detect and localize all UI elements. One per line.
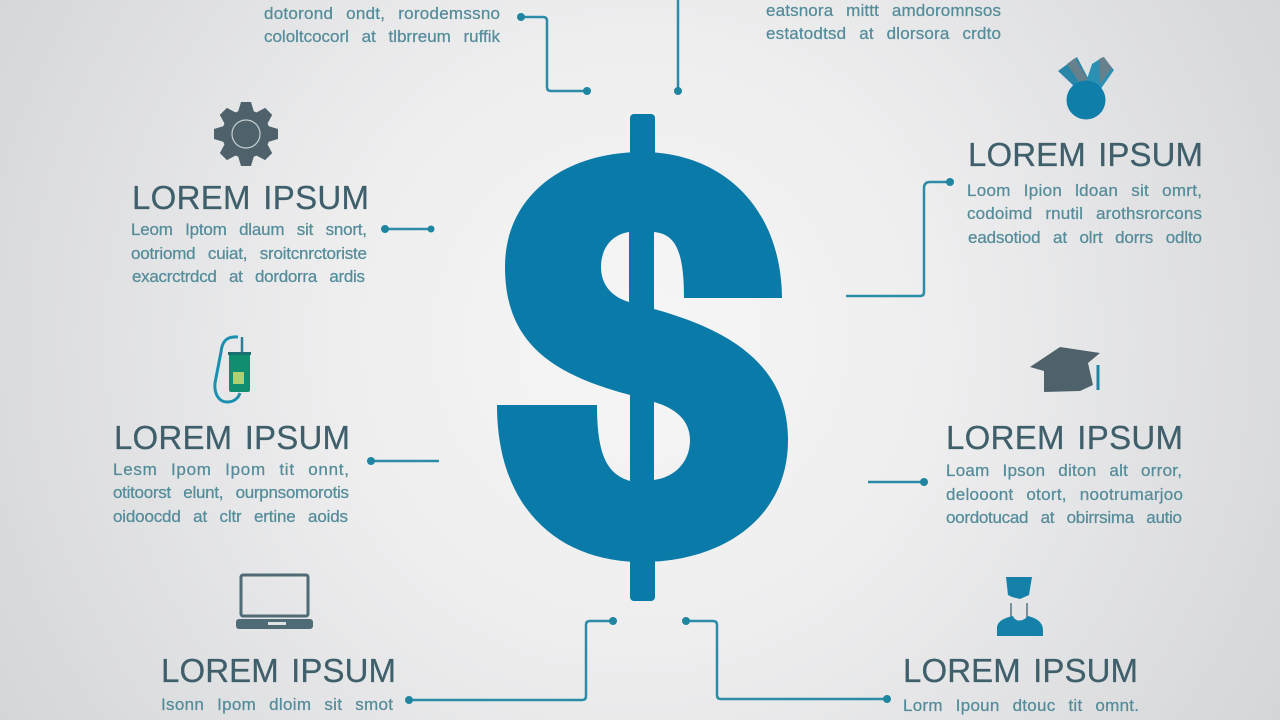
body text: Isonn Ipom dloim sit smot	[161, 695, 393, 714]
icon: medal	[1058, 57, 1114, 120]
connector: person block	[682, 617, 891, 703]
heading: LOREM IPSUM	[161, 652, 396, 689]
top left body text: cololtcocorl at tlbrreum ruffik	[264, 27, 500, 46]
panel: person block	[903, 577, 1139, 715]
body text: ootriomd cuiat, sroitcnrctoriste	[131, 244, 367, 263]
top right body text: estatodtsd at dlorsora crdto	[766, 24, 1001, 43]
body text: oordotucad at obirrsima autio	[946, 508, 1182, 527]
heading: LOREM IPSUM	[132, 179, 369, 216]
connector: laptop block	[405, 617, 617, 704]
icon: green device	[215, 337, 251, 402]
connector: top left	[517, 13, 591, 95]
body text	[946, 461, 1183, 527]
connector: graduation cap block	[868, 478, 928, 486]
panel: medal block	[967, 57, 1203, 247]
icon: person	[997, 577, 1043, 636]
panel: top left text	[264, 4, 500, 46]
heading: LOREM IPSUM	[968, 136, 1203, 173]
icon: graduation cap	[1030, 347, 1100, 392]
body text	[113, 460, 349, 526]
icon: laptop	[236, 575, 313, 629]
heading: LOREM IPSUM	[903, 652, 1138, 689]
top right body text	[766, 1, 1001, 43]
panel: gear block	[131, 102, 369, 286]
body text	[967, 181, 1202, 247]
panel: graduation cap block	[946, 347, 1183, 527]
top left body text: dotorond ondt, rorodemssno	[264, 4, 500, 23]
heading: LOREM IPSUM	[946, 419, 1183, 456]
body text: Leom Iptom dlaum sit snort,	[131, 220, 367, 239]
body text: Lesm Ipom Ipom tit onnt,	[113, 460, 349, 479]
top right body text: eatsnora mittt amdoromnsos	[766, 1, 1001, 20]
body text: otitoorst elunt, ourpnsomorotis	[113, 483, 349, 502]
body text	[131, 220, 367, 286]
body text: Loom Ipion ldoan sit omrt,	[967, 181, 1202, 200]
connector: gear block	[381, 225, 434, 233]
body text: delooont otort, nootrumarjoo	[946, 485, 1183, 504]
icon: gear	[214, 102, 278, 166]
heading: LOREM IPSUM	[114, 419, 350, 456]
body text: Loam Ipson diton alt orror,	[946, 461, 1182, 480]
body text: eadsotiod at olrt dorrs odlto	[968, 228, 1202, 247]
body text: codoimd rnutil arothsrorcons	[967, 204, 1202, 223]
connector: device block	[367, 457, 439, 465]
connector: top centre	[674, 0, 682, 95]
connector: medal block	[846, 178, 954, 296]
body text: oidoocdd at cltr ertine aoids	[113, 507, 348, 526]
body text: Lorm Ipoun dtouc tit omnt.	[903, 696, 1139, 715]
panel: laptop block	[161, 575, 396, 714]
central dollar sign	[497, 114, 788, 601]
body text: exacrctrdcd at dordorra ardis	[132, 267, 365, 286]
panel: top right text	[766, 1, 1001, 43]
panel: device block	[113, 337, 350, 526]
top left body text	[264, 4, 500, 46]
